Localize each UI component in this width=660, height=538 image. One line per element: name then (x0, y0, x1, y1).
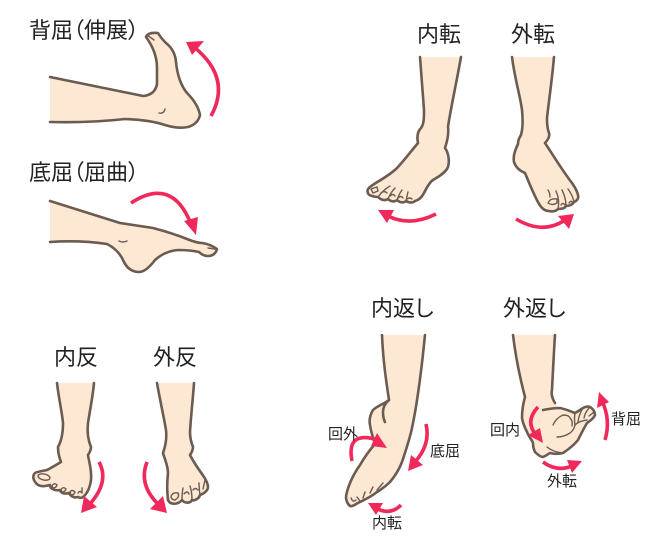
heading: eversion: 外返し (503, 296, 566, 321)
panel: abduction (511, 22, 578, 229)
arrow: dorsiflexion (186, 41, 218, 116)
heading: dorsiflexion: 背屈（伸展） (29, 18, 139, 43)
label: dorsiflexion: 背屈 (611, 411, 641, 428)
panel: dorsiflexion (29, 18, 218, 128)
foot: dorsiflexion (50, 33, 200, 128)
heading: adduction: 内転 (417, 22, 461, 47)
heading: inversion: 内返し (371, 296, 434, 321)
arrow: plantar flexion (131, 193, 198, 235)
arrow: plantar flexion (408, 424, 427, 471)
panel: adduction (368, 22, 461, 223)
foot: adduction (368, 57, 461, 202)
heading: varus: 内反 (54, 345, 98, 370)
foot: plantar flexion (50, 201, 217, 272)
heading: valgus: 外反 (153, 345, 197, 370)
arrow: dorsiflexion (597, 392, 609, 440)
arrow: pronation (528, 407, 543, 443)
foot: eversion (513, 335, 595, 457)
arrow: adduction (368, 503, 401, 515)
heading: plantar flexion: 底屈（屈曲） (29, 160, 139, 185)
arrow: valgus (144, 462, 167, 513)
label: plantar flexion: 底屈 (430, 443, 460, 460)
foot: abduction (512, 57, 578, 211)
label: supination: 回外 (328, 426, 358, 443)
label: adduction: 内転 (372, 515, 402, 532)
foot: inversion (346, 335, 425, 506)
label: abduction: 外転 (547, 473, 577, 490)
foot: varus (33, 383, 94, 498)
arrow: supination (351, 433, 387, 461)
label: pronation: 回内 (490, 422, 520, 439)
arrow: varus (81, 462, 103, 513)
panel: inversion (328, 296, 460, 532)
panel: varus (33, 345, 103, 513)
arrow: adduction (378, 210, 436, 223)
heading: abduction: 外転 (511, 22, 555, 47)
panel: plantar flexion (29, 160, 217, 272)
arrow: abduction (516, 214, 574, 229)
panel: valgus (144, 345, 208, 513)
foot: valgus (157, 383, 208, 504)
panel: eversion (490, 296, 641, 490)
arrow: abduction (543, 460, 582, 473)
